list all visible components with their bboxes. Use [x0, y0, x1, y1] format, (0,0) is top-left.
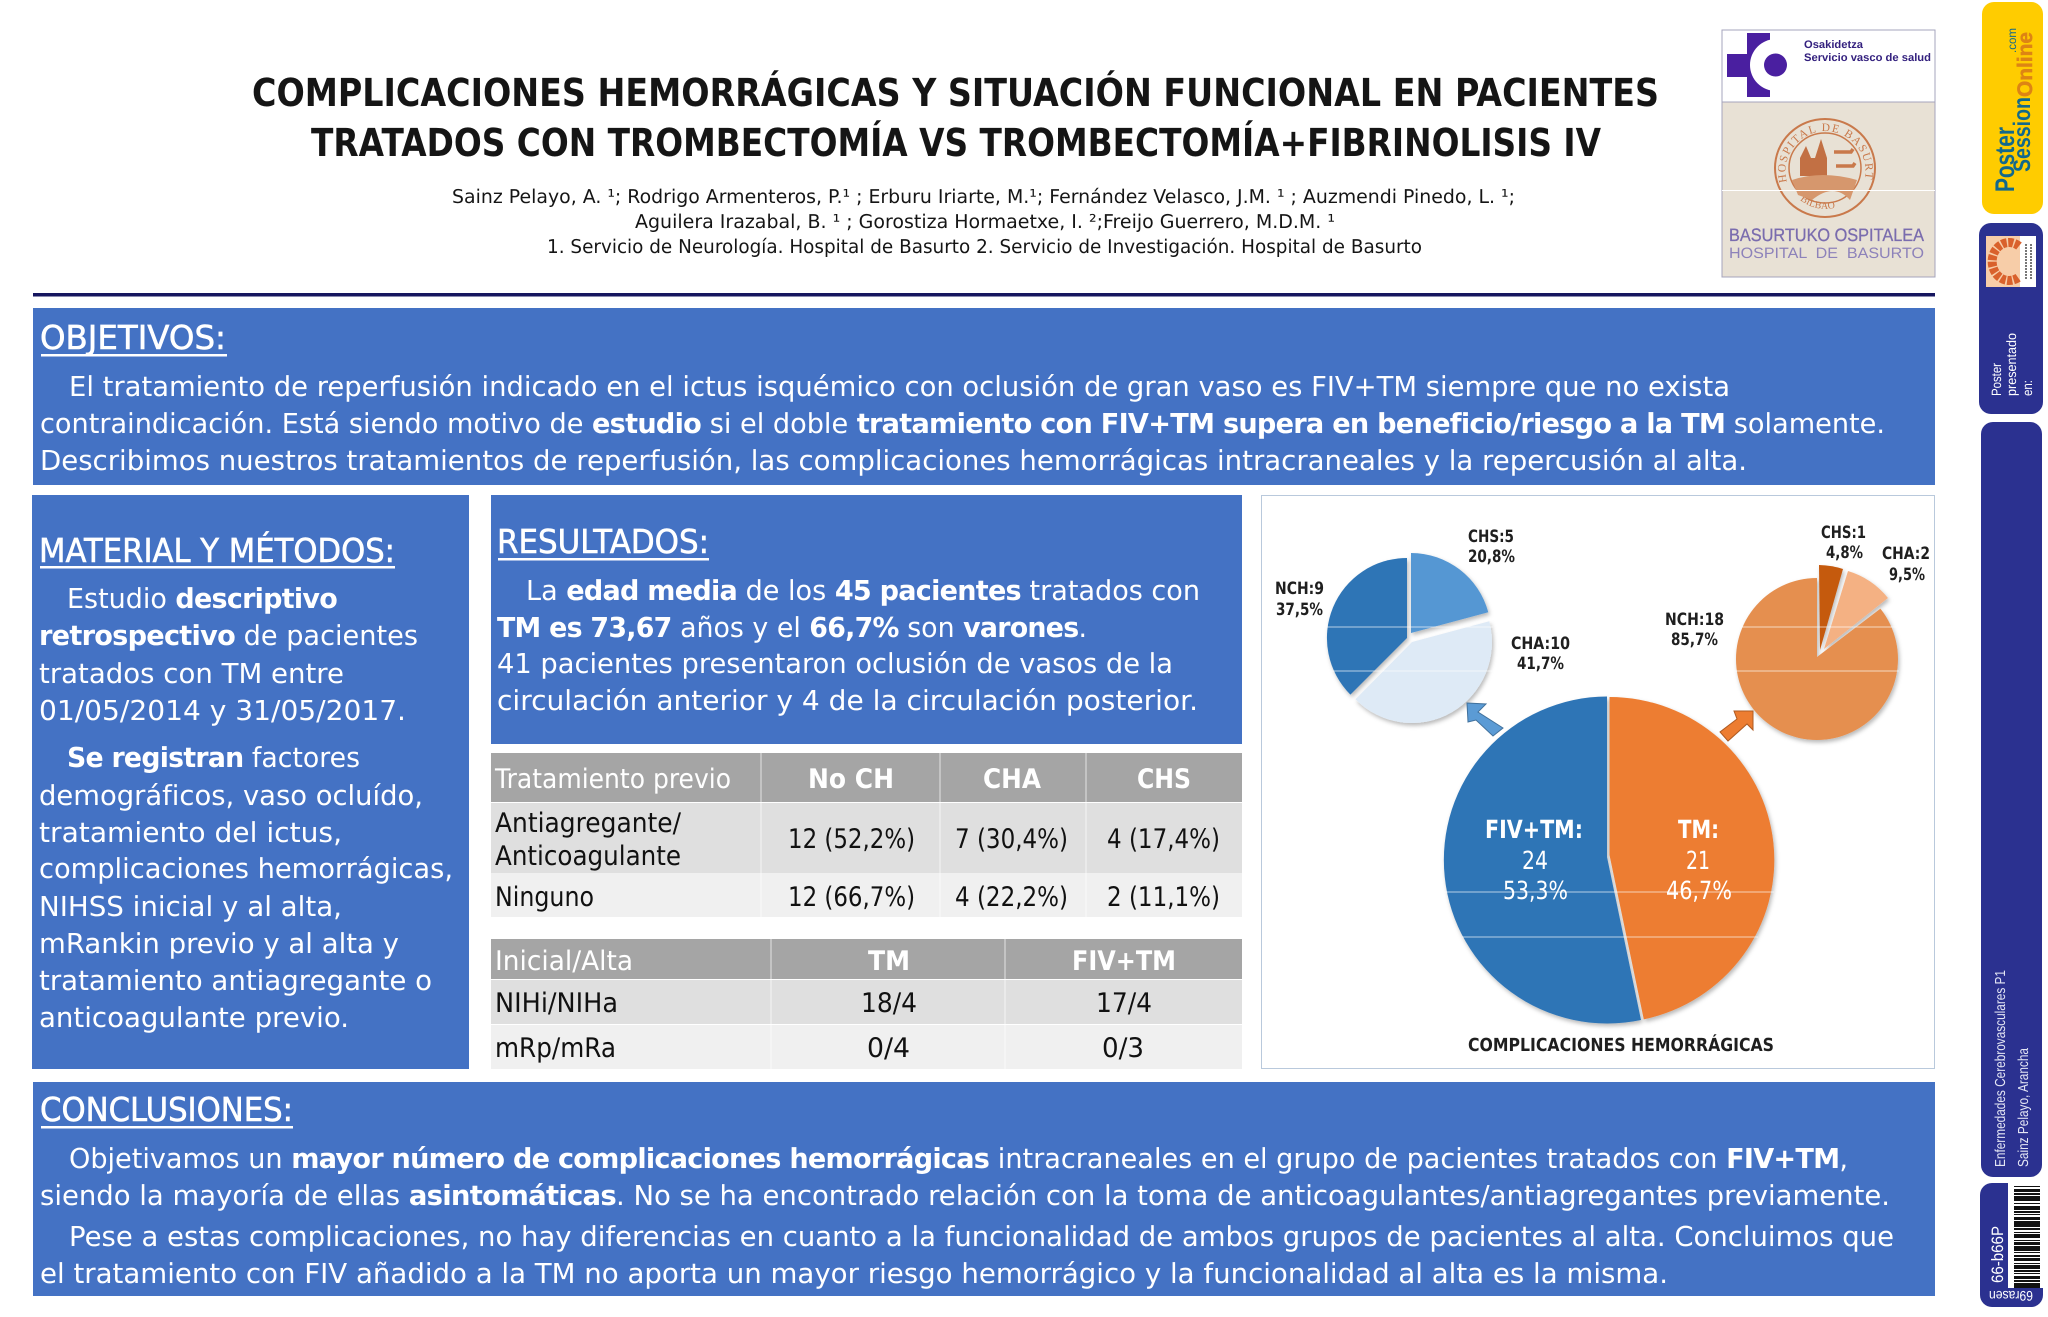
seal: church towers	[1800, 139, 1827, 176]
table: tratamiento previo: Ninguno	[495, 882, 594, 913]
panel: resultados	[491, 495, 1242, 744]
heading: material y métodos: MATERIAL Y MÉTODOS:	[39, 531, 395, 570]
labels: FIV+TM breakdown: 41,7%	[1517, 654, 1564, 674]
text: material y métodos: complicaciones hemorrágicas,	[39, 853, 453, 885]
labels: FIV+TM breakdown: NCH:9	[1275, 579, 1324, 599]
panel: material y métodos	[32, 495, 469, 1069]
sidebar: poster session online badge: Session	[2009, 97, 2036, 172]
text: material y métodos: anticoagulante previo.	[39, 1002, 349, 1034]
text: material y métodos	[39, 583, 453, 1034]
chart: TM breakdown pie	[1736, 565, 1898, 740]
logo: Osakidetza and Hospital de Basurto: BASURTUKO OSPITALEA	[1729, 225, 1924, 245]
table: inicial/alta: Inicial/Alta	[495, 946, 633, 977]
labels: FIV+TM breakdown: CHA:10	[1511, 634, 1570, 654]
sidebar: poster presentado en: Poster	[1989, 363, 2004, 396]
sidebar: session and author: Enfermedades Cerebrovasculares P1	[1993, 970, 2009, 1167]
table: tratamiento previo	[491, 753, 1242, 917]
sidebar: poster presentado en	[1979, 223, 2043, 414]
chart caption: COMPLICACIONES HEMORRÁGICAS	[1468, 1034, 1774, 1056]
table: inicial/alta: FIV+TM	[1072, 946, 1176, 977]
table: tratamiento previo: Antiagregante/	[495, 808, 682, 839]
labels: TM slice: 21	[1686, 846, 1710, 875]
sidebar: poster presentado en: presentado	[2004, 333, 2019, 396]
heading: objetivos: OBJETIVOS:	[40, 318, 226, 357]
table: tratamiento previo: Tratamiento previo	[494, 764, 731, 795]
panel: objetivos	[33, 308, 1935, 485]
text: material y métodos: mRankin previo y al alta y	[39, 928, 399, 960]
text: objetivos: Describimos nuestros tratamientos de reperfusión, las complicaciones hemorrágicas intracraneales y la repercusión al alta.	[40, 445, 1747, 477]
labels: TM breakdown: 4,8%	[1826, 543, 1863, 563]
icon: brain congress logo	[1986, 236, 2036, 287]
text: material y métodos: tratamiento antiagregante o	[39, 965, 432, 997]
seal: bridge	[1792, 175, 1857, 200]
chart: FIV+TM breakdown pie	[1327, 553, 1492, 723]
sidebar: poster session online badge: Poster	[1990, 127, 2020, 192]
table: tratamiento previo: 12 (66,7%)	[788, 882, 915, 913]
heading: conclusiones: CONCLUSIONES:	[40, 1090, 293, 1129]
authors and affiliations: Aguilera Irazabal, B. ¹ ; Gorostiza Hormaetxe, I. ²;Freijo Guerrero, M.D.M. ¹	[635, 211, 1335, 233]
text: material y métodos: demográficos, vaso ocluído,	[39, 780, 423, 812]
table: tratamiento previo: 4 (17,4%)	[1107, 824, 1220, 855]
text: conclusiones	[40, 1143, 1894, 1290]
text: resultados: La edad media de los 45 pacientes tratados con	[526, 575, 1200, 607]
arrow: blue to FIV+TM pie	[1467, 703, 1503, 736]
title: TRATADOS CON TROMBECTOMÍA VS TROMBECTOMÍA+FIBRINOLISIS IV	[311, 120, 1601, 166]
arrow: orange to TM pie	[1720, 711, 1753, 741]
sidebar: barcode id: 69rasen	[1989, 1288, 2033, 1304]
text: conclusiones: siendo la mayoría de ellas asintomáticas. No se ha encontrado relación con la toma de anticoagulantes/antiagregantes previamente.	[40, 1180, 1890, 1212]
authors and affiliations: 1. Servicio de Neurología. Hospital de Basurto 2. Servicio de Investigación. Hospital de Basurto	[547, 236, 1422, 258]
table: tratamiento previo: 12 (52,2%)	[788, 824, 915, 855]
labels: FIV+TM breakdown: 20,8%	[1468, 547, 1515, 567]
labels: TM breakdown: 9,5%	[1889, 565, 1925, 585]
labels: TM slice: TM:	[1678, 815, 1719, 844]
heading: resultados: RESULTADOS:	[497, 522, 709, 561]
sidebar: session and author	[1981, 422, 2042, 1177]
table: tratamiento previo: 4 (22,2%)	[955, 882, 1068, 913]
sidebar: poster session online badge: .com	[2005, 28, 2019, 53]
labels: FIV+TM slice: FIV+TM:	[1485, 815, 1583, 844]
text: resultados: circulación anterior y 4 de la circulación posterior.	[497, 685, 1198, 717]
table: inicial/alta: mRp/mRa	[495, 1033, 616, 1064]
table: inicial/alta: 0/4	[867, 1033, 910, 1064]
logo: Osakidetza and Hospital de Basurto: BILBAO	[1800, 197, 1834, 209]
logo: Osakidetza and Hospital de Basurto: Servicio vasco de salud	[1804, 52, 1931, 64]
table: inicial/alta: 17/4	[1096, 988, 1152, 1019]
text: material y métodos: tratados con TM entre	[39, 658, 344, 690]
table: tratamiento previo: No CH	[808, 764, 894, 795]
chart: main pie FIV+TM vs TM	[1444, 696, 1774, 1023]
table: inicial/alta: 0/3	[1102, 1033, 1144, 1064]
text: material y métodos: Se registran factores	[67, 742, 360, 774]
labels: TM breakdown: NCH:18	[1665, 610, 1724, 630]
logo: Osakidetza and Hospital de Basurto: Osakidetza	[1804, 39, 1864, 51]
labels: FIV+TM slice: 24	[1522, 846, 1548, 875]
sidebar: session and author: Sainz Pelayo, Arancha	[2016, 1047, 2032, 1167]
table: tratamiento previo: CHA	[983, 764, 1041, 795]
table: inicial/alta: NIHi/NIHa	[495, 988, 618, 1019]
text: conclusiones: Objetivamos un mayor número de complicaciones hemorrágicas intracraneales en el grupo de pacientes tratados con FIV+TM,	[69, 1143, 1848, 1175]
labels: TM breakdown	[1665, 523, 1930, 650]
table: tratamiento previo: 7 (30,4%)	[955, 824, 1068, 855]
labels: FIV+TM slice	[1485, 815, 1583, 905]
labels: TM breakdown: 85,7%	[1671, 630, 1718, 650]
labels: FIV+TM breakdown	[1275, 527, 1570, 674]
table: inicial/alta: TM	[868, 946, 910, 977]
labels: TM breakdown: CHA:2	[1882, 544, 1930, 564]
sidebar: barcode id	[1980, 1183, 2043, 1307]
text: material y métodos: tratamiento del ictus,	[39, 817, 342, 849]
text: objetivos: contraindicación. Está siendo motivo de estudio si el doble tratamiento con FIV+TM supera en beneficio/riesgo a la TM solamente.	[40, 408, 1885, 440]
panel: pie charts complicaciones hemorrágicas	[1262, 496, 1934, 1068]
sidebar: poster presentado en: en:	[2020, 380, 2035, 396]
text: objetivos	[40, 371, 1885, 477]
labels: TM breakdown: CHS:1	[1821, 523, 1866, 543]
text: material y métodos: retrospectivo de pacientes	[39, 620, 418, 652]
text: resultados: TM es 73,67 años y el 66,7% son varones.	[497, 612, 1087, 644]
text: resultados: 41 pacientes presentaron oclusión de vasos de la	[497, 648, 1173, 680]
labels: TM slice	[1666, 815, 1732, 905]
table: tratamiento previo: CHS	[1137, 764, 1191, 795]
table: inicial/alta	[491, 939, 1242, 1069]
text: objetivos: El tratamiento de reperfusión indicado en el ictus isquémico con oclusión de gran vaso es FIV+TM siempre que no exista	[69, 371, 1730, 403]
text: material y métodos: NIHSS inicial y al alta,	[39, 891, 342, 923]
text: conclusiones: el tratamiento con FIV añadido a la TM no aporta un mayor riesgo hemorrágico y la funcionalidad al alta es la misma.	[40, 1258, 1668, 1290]
sidebar: barcode id: 66-b66P	[1989, 1226, 2007, 1283]
title	[252, 70, 1659, 166]
authors and affiliations	[452, 186, 1515, 258]
text: conclusiones: Pese a estas complicaciones, no hay diferencias en cuanto a la funcionalidad de ambos grupos de pacientes al alta. Concluimos que	[69, 1221, 1894, 1253]
title: COMPLICACIONES HEMORRÁGICAS Y SITUACIÓN FUNCIONAL EN PACIENTES	[252, 70, 1659, 116]
logo: Osakidetza and Hospital de Basurto: HOSPITAL DE BASURTO	[1729, 245, 1924, 262]
seal: wolves	[1834, 149, 1855, 166]
text: material y métodos: 01/05/2014 y 31/05/2017.	[39, 695, 406, 727]
table: inicial/alta: 18/4	[861, 988, 917, 1019]
labels: TM slice: 46,7%	[1666, 876, 1732, 905]
authors and affiliations: Sainz Pelayo, A. ¹; Rodrigo Armenteros, P.¹ ; Erburu Iriarte, M.¹; Fernández Velasco, J.M. ¹ ; Auzmendi Pinedo, L. ¹;	[452, 186, 1515, 208]
table: tratamiento previo: Anticoagulante	[495, 841, 681, 872]
labels: FIV+TM breakdown: CHS:5	[1468, 527, 1514, 547]
labels: FIV+TM breakdown: 37,5%	[1276, 600, 1323, 620]
table: tratamiento previo: 2 (11,1%)	[1107, 882, 1220, 913]
text: material y métodos: Estudio descriptivo	[67, 583, 337, 615]
sidebar: poster session online badge	[1982, 2, 2043, 214]
text: resultados	[497, 575, 1200, 717]
labels: FIV+TM slice: 53,3%	[1503, 876, 1568, 905]
panel: conclusiones	[33, 1082, 1935, 1296]
sidebar: poster session online badge: Online	[2014, 32, 2037, 97]
logo: Osakidetza and Hospital de Basurto	[1722, 30, 1936, 278]
